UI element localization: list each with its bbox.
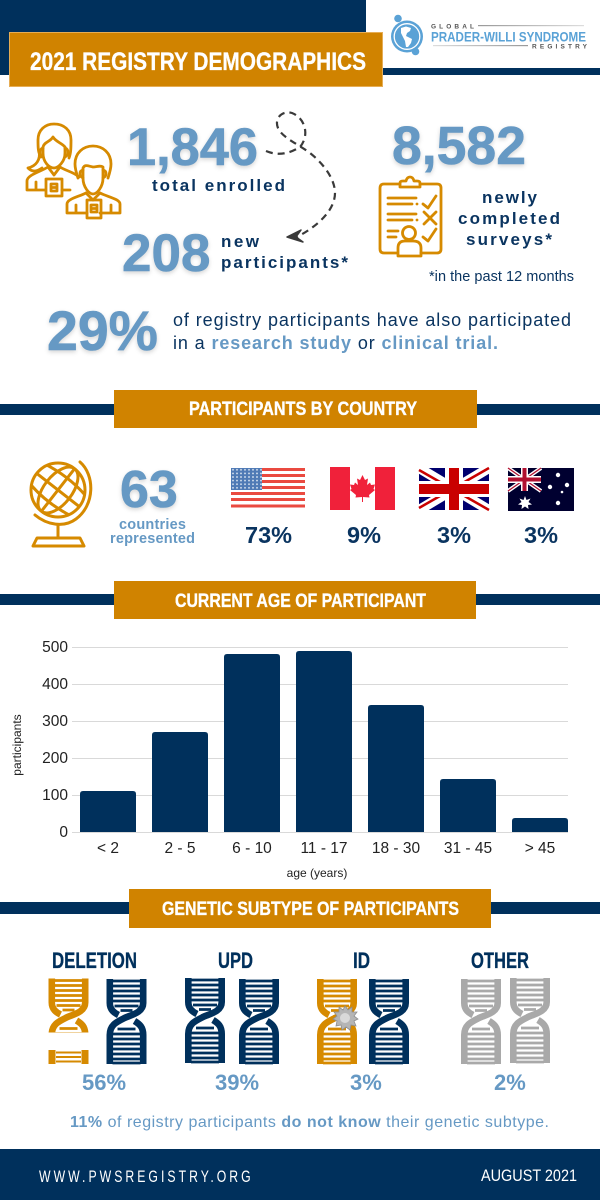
stat: countries represented: represented — [110, 531, 195, 547]
stat: research participation: in a research study or clinical trial. — [173, 333, 498, 353]
footer: AUGUST 2021 — [481, 1166, 577, 1185]
y axis labels: 0 — [59, 824, 68, 841]
bar chart: age of participant — [10, 639, 568, 880]
stat: new participants — [122, 224, 348, 283]
country percentages: 9% — [347, 522, 381, 548]
stat: countries represented — [110, 461, 195, 547]
subtype: UPD: UPD — [218, 948, 253, 973]
flag: United States — [231, 468, 305, 508]
icon: paired chromosomes — [188, 978, 276, 1064]
x axis title: age (years) — [287, 866, 347, 880]
heading: participants by country: PARTICIPANTS BY COUNTRY — [189, 399, 417, 420]
stat: total enrolled: 1,846 — [127, 118, 258, 177]
stat: countries represented: 63 — [120, 461, 178, 519]
stat: research participation: of registry participants have also participated — [173, 310, 571, 330]
x axis labels — [97, 840, 555, 857]
subtype: other — [464, 948, 547, 1095]
title banner — [10, 32, 382, 86]
icon: globe — [30, 460, 92, 548]
subtype: other: OTHER — [471, 948, 529, 973]
country percentages: 3% — [437, 522, 471, 548]
subtype: deletion: 56% — [82, 1070, 126, 1095]
logo: REGISTRY — [532, 44, 588, 50]
subtype: deletion: DELETION — [52, 948, 137, 973]
arrow: dashed loop — [266, 112, 335, 242]
subtype: UPD — [188, 948, 276, 1095]
footer: WWW.PWSREGISTRY.ORG — [39, 1168, 251, 1187]
stat: completed surveys: 8,582 — [392, 116, 526, 176]
icon: intact chromosome — [110, 979, 143, 1064]
subtype: other: 2% — [494, 1070, 526, 1095]
stat: countries represented: countries — [119, 517, 186, 533]
icon: grey chromosomes — [464, 978, 547, 1064]
stat: total enrolled: total enrolled — [152, 176, 285, 195]
x axis labels: 6 - 10 — [232, 840, 272, 857]
heading: current age of participant: CURRENT AGE OF PARTICIPANT — [175, 591, 426, 612]
y axis labels: 100 — [42, 787, 68, 804]
subtype: ID: ID — [353, 948, 370, 973]
y axis labels: 400 — [42, 676, 68, 693]
icon: two participants — [27, 124, 120, 218]
subtype: ID — [320, 948, 406, 1095]
stat: completed surveys: newly — [482, 188, 538, 207]
country percentages — [245, 522, 558, 548]
icon: deleted chromosome — [48, 978, 88, 1064]
x axis labels: < 2 — [97, 840, 119, 857]
flag: Canada — [330, 467, 395, 510]
icon: survey clipboard — [380, 177, 441, 256]
bars — [80, 651, 568, 832]
stat: completed surveys — [392, 116, 560, 249]
stat: completed surveys: completed — [458, 209, 560, 228]
stat: research participation — [47, 299, 571, 362]
x axis labels: 2 - 5 — [164, 840, 196, 857]
footer — [0, 1149, 600, 1200]
heading: genetic subtype — [0, 889, 600, 928]
country percentages: 73% — [245, 522, 292, 548]
stat: completed surveys: surveys* — [466, 230, 552, 249]
y axis labels: 200 — [42, 750, 68, 767]
logo — [391, 15, 588, 55]
subtype: UPD: 39% — [215, 1070, 259, 1095]
footnote: *in the past 12 months — [429, 269, 574, 285]
icon: imprinting defect chromosomes — [320, 979, 406, 1064]
subtype: deletion — [48, 948, 143, 1095]
y axis labels: 300 — [42, 713, 68, 730]
flag: Australia — [508, 468, 574, 511]
subtype: ID: 3% — [350, 1070, 382, 1095]
stat: research participation: 29% — [47, 299, 158, 362]
note: unknown subtype: 11% of registry participants do not know their genetic subtype. — [70, 1114, 549, 1131]
stat: new participants: participants* — [221, 253, 348, 272]
logo: GLOBAL — [431, 24, 474, 30]
country percentages: 3% — [524, 522, 558, 548]
heading: genetic subtype: GENETIC SUBTYPE OF PARTICIPANTS — [162, 899, 459, 920]
y axis title: participants — [10, 714, 24, 776]
y axis labels: 500 — [42, 639, 68, 656]
heading: current age of participant — [0, 581, 600, 619]
x axis labels: 18 - 30 — [372, 840, 421, 857]
y axis labels — [42, 639, 68, 841]
stat: new participants: new — [221, 232, 260, 251]
header band — [0, 0, 600, 75]
title banner: 2021 REGISTRY DEMOGRAPHICS — [30, 48, 366, 76]
stat: total enrolled — [127, 118, 285, 195]
x axis labels: 11 - 17 — [300, 840, 348, 857]
stat: new participants: 208 — [122, 224, 210, 283]
x axis labels: > 45 — [525, 840, 555, 857]
heading: participants by country — [0, 390, 600, 428]
x axis labels: 31 - 45 — [444, 840, 492, 857]
flag: United Kingdom — [419, 468, 489, 510]
